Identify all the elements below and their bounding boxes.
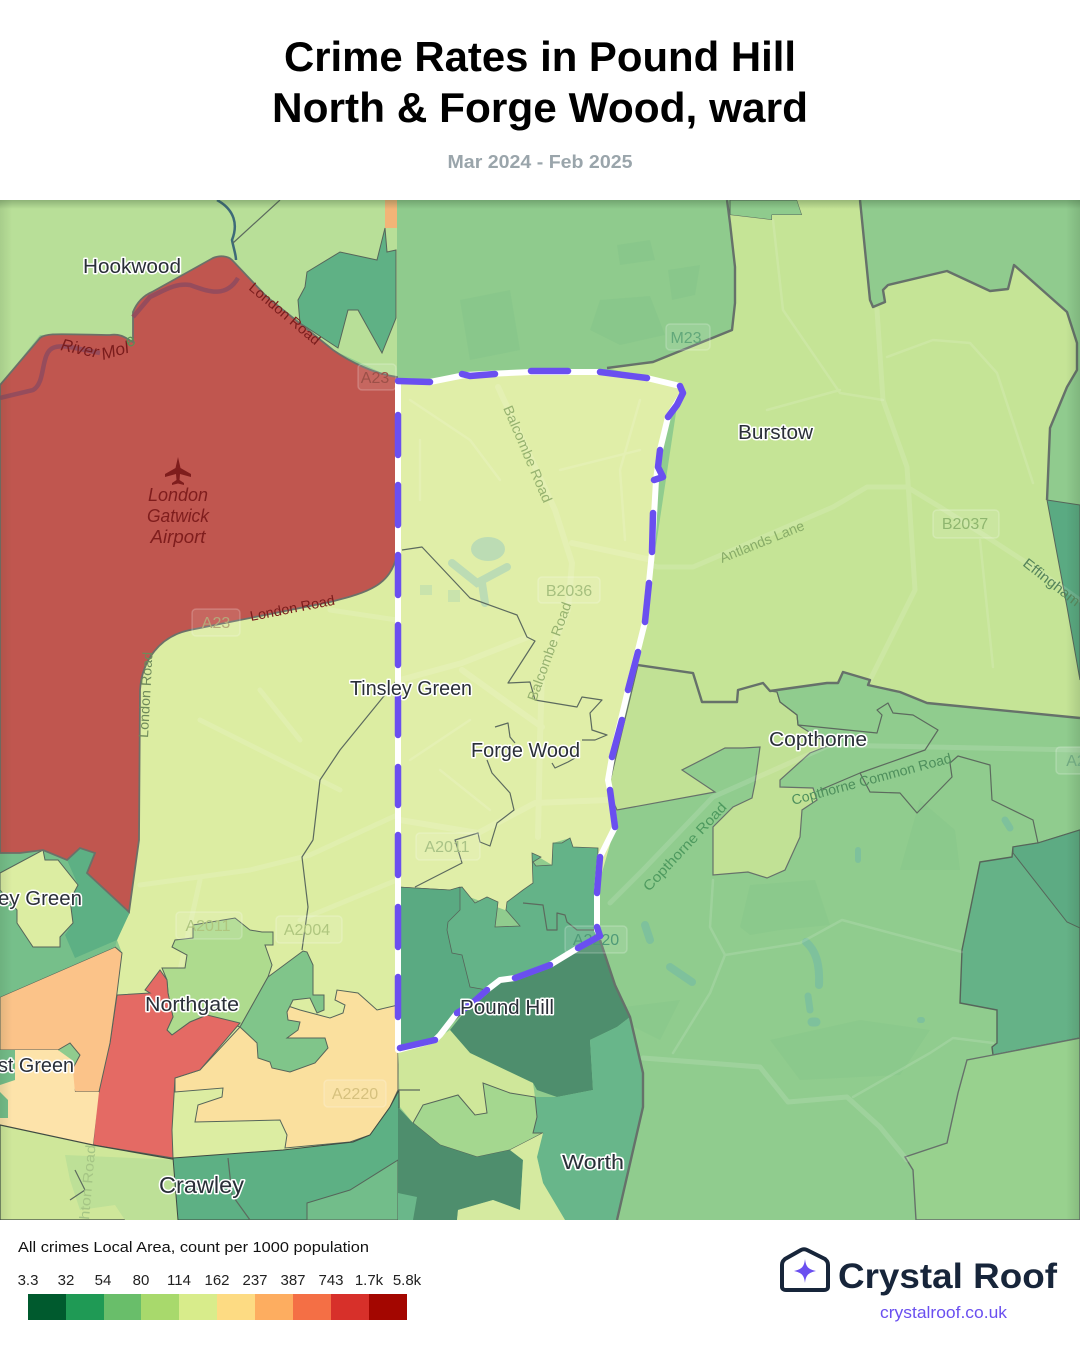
region: Pound Hill west darker bbox=[398, 887, 487, 1050]
patches: north centre fields bbox=[460, 240, 700, 360]
legend values: 3.3 bbox=[18, 1272, 38, 1289]
map bbox=[0, 200, 1080, 1220]
region: ward light area bbox=[398, 372, 683, 910]
legend colour scale bbox=[28, 1294, 407, 1320]
ward boundary: purple dashes bbox=[398, 371, 683, 1048]
legend values: 80 bbox=[133, 1272, 149, 1289]
region: cream west bbox=[0, 1050, 99, 1145]
region: north centre bbox=[397, 200, 402, 228]
region: Pound Hill dark high contrast bbox=[450, 940, 630, 1097]
road shields bbox=[176, 324, 1080, 1107]
logo: Crystal Roof bbox=[782, 1249, 1057, 1322]
road names: Balcombe Road bbox=[524, 600, 574, 703]
legend values: 54 bbox=[95, 1272, 111, 1289]
region: south east lighter bbox=[905, 1038, 1080, 1220]
label: London Gatwick Airport: Airport bbox=[149, 527, 207, 547]
road shields: B2036 bbox=[546, 583, 592, 600]
place labels: Burstow bbox=[738, 422, 814, 444]
river bbox=[217, 200, 236, 260]
region: Burstow bbox=[607, 200, 1080, 718]
region: ey Green light bbox=[0, 850, 78, 947]
place labels: Forge Wood bbox=[471, 740, 580, 762]
road names: Balcombe Road bbox=[500, 403, 556, 505]
region: small green south bbox=[398, 1193, 417, 1220]
region: green south of Tinsley bbox=[240, 951, 328, 1072]
region: west green bbox=[0, 848, 130, 997]
road names: e bbox=[120, 330, 140, 351]
label: London Gatwick Airport: London bbox=[148, 485, 208, 505]
place labels: Hookwood bbox=[83, 256, 181, 278]
region: small patch at top bbox=[730, 200, 802, 220]
river through airport bbox=[0, 278, 238, 398]
region: north east bbox=[860, 200, 1080, 505]
region: west green darker bbox=[65, 848, 130, 958]
road names bbox=[59, 279, 1080, 1220]
legend bbox=[18, 1239, 422, 1320]
legend values: 237 bbox=[242, 1272, 268, 1289]
road shields: A23 bbox=[202, 615, 230, 632]
region: pale south bbox=[457, 1133, 565, 1220]
label: London Gatwick Airport bbox=[147, 485, 210, 547]
place labels: Northgate bbox=[145, 994, 239, 1016]
region: bottom left bbox=[0, 1125, 178, 1220]
place labels: Tinsley Green bbox=[350, 678, 472, 700]
place labels: Copthorne bbox=[769, 729, 867, 751]
road names: Mol bbox=[99, 338, 132, 364]
region: Gatwick Airport high crime bbox=[0, 256, 397, 912]
ward boundary: white line bbox=[398, 372, 683, 1050]
roads and lake in ward bbox=[400, 387, 652, 837]
legend values: 1.7k bbox=[355, 1272, 384, 1289]
road shields: A2220 bbox=[332, 1086, 378, 1103]
road shields: A2220 bbox=[573, 932, 619, 949]
roads: west bbox=[140, 610, 397, 970]
road names: hton Road bbox=[76, 1144, 99, 1220]
icon: house with star bbox=[782, 1249, 828, 1290]
road shields: A23 bbox=[361, 370, 389, 387]
legend values: 114 bbox=[167, 1272, 191, 1289]
road shields: M23 bbox=[670, 330, 702, 347]
roads: east bbox=[600, 220, 1080, 1160]
place labels: Pound Hill bbox=[460, 997, 554, 1019]
patches: south east fields bbox=[600, 800, 960, 1080]
region: bottom left light green bbox=[65, 1155, 178, 1220]
place labels: Crawley bbox=[159, 1172, 245, 1198]
logo wordmark: Crystal Roof bbox=[838, 1257, 1057, 1296]
region: Worth bbox=[533, 1017, 643, 1220]
icon: airport plane bbox=[165, 457, 191, 485]
legend values: 162 bbox=[204, 1272, 230, 1289]
road names: River bbox=[59, 335, 102, 362]
logo url: crystalroof.co.uk bbox=[880, 1303, 1008, 1322]
region: Copthorne light area bbox=[608, 665, 830, 878]
place labels bbox=[0, 256, 867, 1198]
road names: London Road bbox=[249, 592, 336, 624]
region: Crawley lighter corner bbox=[307, 1160, 398, 1220]
legend values: 387 bbox=[280, 1272, 306, 1289]
region: Northgate green bbox=[162, 918, 273, 1035]
road shields: A2011 bbox=[185, 918, 231, 935]
region: east strip bbox=[1047, 500, 1080, 680]
ponds bbox=[645, 820, 1010, 1022]
road names: Copthorne Common Road bbox=[790, 750, 953, 808]
boundary line by river bbox=[233, 200, 280, 243]
road shields: A2004 bbox=[284, 922, 330, 939]
region: small orange area top bbox=[385, 200, 397, 228]
region: Crawley centre green bbox=[173, 1090, 399, 1220]
place labels: st Green bbox=[0, 1055, 74, 1077]
road names: London Road bbox=[135, 651, 155, 738]
region: peach west bbox=[0, 947, 122, 1092]
region: Pound Hill green bbox=[398, 838, 598, 1050]
region: Crawley orange-cream bbox=[175, 990, 398, 1148]
region: dark east block bbox=[960, 830, 1080, 1055]
road names: London Road bbox=[246, 279, 324, 348]
subtitle: date range: Mar 2024 - Feb 2025 bbox=[448, 152, 632, 172]
region: light area south of Pound Hill bbox=[398, 1030, 535, 1123]
road shields: A2011 bbox=[424, 839, 470, 856]
legend values: 32 bbox=[58, 1272, 74, 1289]
road names: Copthorne Road bbox=[639, 799, 730, 894]
road names: Antlands Lane bbox=[717, 517, 807, 566]
place labels: ey Green bbox=[0, 888, 82, 910]
region: north west green area bbox=[298, 228, 396, 353]
region: dark south bbox=[398, 1107, 523, 1220]
region: small green patches west bbox=[0, 1050, 15, 1118]
place labels: Worth bbox=[562, 1152, 624, 1174]
region: far east darker block bbox=[1013, 830, 1080, 928]
title bbox=[272, 33, 808, 131]
title: North & Forge Wood, ward bbox=[272, 84, 808, 131]
vignette edges bbox=[0, 200, 1080, 1220]
label: London Gatwick Airport: Gatwick bbox=[147, 506, 210, 526]
region boundaries bbox=[70, 200, 1080, 1220]
legend values: 5.8k bbox=[393, 1272, 422, 1289]
region: Tinsley Green west bbox=[93, 555, 399, 1158]
legend title: All crimes Local Area, count per 1000 population bbox=[18, 1239, 369, 1256]
region: Northgate red bbox=[93, 970, 240, 1158]
legend values bbox=[18, 1272, 422, 1289]
title: Crime Rates in Pound Hill bbox=[284, 33, 796, 80]
boundary: Worth east bbox=[600, 940, 643, 1220]
region: mid green south bbox=[413, 1083, 543, 1157]
road names: Effingham bbox=[1020, 555, 1080, 609]
legend values: 743 bbox=[318, 1272, 344, 1289]
region: Hookwood bbox=[0, 200, 397, 385]
map base: low crime area bbox=[0, 200, 1080, 1220]
road shields: B2037 bbox=[942, 516, 988, 533]
